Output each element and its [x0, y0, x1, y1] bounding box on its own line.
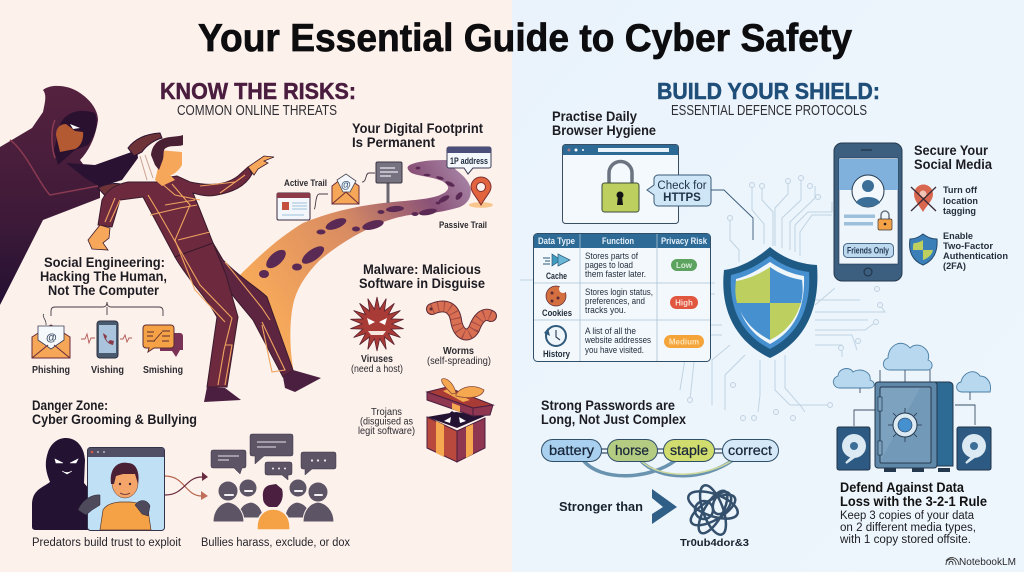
callout: check for HTTPS: HTTPS: [663, 192, 701, 204]
heading: browser hygiene: Browser Hygiene: [552, 122, 656, 138]
icon: phishing envelope: [32, 314, 70, 358]
label: stronger than: Stronger than: [559, 499, 643, 514]
heading: secure social media: Secure Your: [914, 143, 989, 158]
text: enable 2FA: Authentication: [943, 251, 1008, 262]
heading: know the risks: [160, 78, 356, 119]
row: cookies: High: [675, 298, 693, 308]
pill: battery: battery: [549, 443, 594, 458]
labels: viruses and worms: (need a host): [351, 364, 403, 375]
row: cache: them faster later.: [585, 269, 646, 279]
manipulated victim figure with circuit suit: [88, 135, 321, 402]
row: history: Medium: [669, 338, 699, 346]
head: [155, 168, 175, 186]
row: cache: Low: [676, 261, 693, 270]
passphrase chain: [542, 440, 778, 476]
footprints: [259, 166, 464, 278]
connectors: [314, 173, 375, 209]
row: history: History: [543, 349, 570, 359]
text: enable 2FA: [943, 231, 1008, 272]
callout: IP address: 1P address: [450, 156, 488, 166]
right background: [512, 0, 1024, 572]
row: history: website addresses: [584, 335, 651, 345]
row: cookies: [542, 285, 698, 318]
table header: Privacy Risk: [661, 236, 708, 247]
circuit traces: [520, 176, 885, 420]
text: 3-2-1 rule: Defend Against Data: [840, 479, 964, 495]
text: turn off location tagging: tagging: [943, 206, 976, 217]
heading: social engineering: Hacking The Human,: [40, 269, 167, 284]
pill: staple: [664, 440, 714, 462]
row: history: you have visited.: [585, 345, 644, 355]
label: trojans: Trojans: [371, 406, 402, 418]
shoes: [283, 370, 321, 392]
hooded manipulator figure: [0, 86, 162, 305]
heading: malware: Software in Disguise: [359, 276, 485, 291]
icon: smishing chat: [143, 325, 183, 357]
text: 3-2-1 rule: [839, 479, 987, 546]
heading: secure social media: Social Media: [914, 157, 992, 172]
heading: build your shield: ESSENTIAL DEFENCE PROTOCOLS: [671, 103, 867, 119]
pill: battery: [542, 440, 602, 462]
text: 3-2-1 rule: on 2 different media types,: [840, 522, 976, 534]
icon: envelope: @: [341, 180, 351, 191]
captions: predators and bullies: Bullies harass, exclude, or dox: [201, 537, 350, 549]
panel: know the risks: [0, 78, 493, 549]
icon: envelope: [332, 174, 359, 204]
heading: build your shield: BUILD YOUR SHIELD:: [657, 78, 880, 104]
text: enable 2FA: Two-Factor: [943, 241, 993, 252]
safe vault: [875, 382, 953, 472]
back leg: [205, 243, 293, 377]
row: cookies: Stores login status,: [585, 287, 653, 297]
captions: predators and bullies: Predators build trust to exploit: [32, 537, 182, 549]
labels: attack types: Phishing: [32, 364, 70, 376]
row: history: [543, 326, 704, 359]
pill: correct: [722, 440, 778, 462]
labels: viruses and worms: Worms: [443, 345, 474, 357]
left background: [0, 0, 512, 572]
labels: viruses and worms: Viruses: [361, 353, 393, 365]
table: browser data privacy risk: [534, 234, 710, 362]
text: turn off location tagging: Turn off: [943, 185, 978, 196]
labels: attack types: Vishing: [91, 364, 124, 376]
callout: IP address: [447, 147, 491, 174]
crossing arrows: [165, 472, 208, 500]
front leg: [175, 243, 238, 387]
table header: Function: [602, 236, 634, 247]
row: cache: [543, 251, 697, 281]
video window with child: [88, 448, 164, 530]
heading: strong passwords: Strong Passwords are: [541, 398, 675, 413]
table header: Data Type: [538, 236, 575, 247]
title: Your Essential Guide to Cyber Safety: [198, 17, 852, 60]
icon: signpost: [376, 162, 402, 203]
row: cookies: preferences, and: [585, 296, 645, 306]
heading: browser hygiene: Practise Daily: [552, 108, 637, 124]
circuit lines: [105, 175, 285, 385]
callout: check for HTTPS: [647, 175, 753, 240]
label: trojans: [358, 406, 415, 437]
icon: tangled knot: [685, 482, 741, 538]
labels: attack types: [32, 364, 183, 376]
row: history: A list of all the: [585, 326, 636, 336]
heading: browser hygiene: [552, 108, 656, 138]
text: 3-2-1 rule: Loss with the 3-2-1 Rule: [840, 493, 987, 509]
icon: worm: [430, 306, 491, 335]
panel: malware: [350, 262, 493, 462]
central shield: [723, 247, 817, 358]
heading: build your shield: [657, 78, 880, 119]
icon: web page: [277, 193, 310, 220]
label: passive trail: Passive Trail: [439, 220, 487, 231]
label: active trail: Active Trail: [284, 178, 327, 189]
label: trojans: legit software): [358, 426, 415, 437]
panel: social engineering: [32, 255, 183, 376]
speech bubbles: [211, 434, 336, 480]
panel: build your shield: [520, 78, 1008, 549]
callout: check for HTTPS: Check for: [657, 180, 707, 192]
text: enable 2FA: Enable: [943, 231, 973, 242]
captions: predators and bullies: [32, 537, 350, 549]
predator silhouette: [32, 438, 90, 530]
text: turn off location tagging: [943, 185, 978, 217]
heading: danger zone: [32, 398, 197, 427]
icon: small shield: [910, 234, 937, 265]
heading: social engineering: [40, 255, 167, 298]
digital footprint trail: [240, 121, 493, 372]
heading: know the risks: KNOW THE RISKS:: [160, 78, 356, 104]
icon: location off: [911, 184, 936, 212]
hard drives: [837, 427, 991, 470]
icon: trojan gift box: [427, 379, 493, 462]
hand on arm: [98, 184, 129, 200]
panel: danger zone: [32, 398, 350, 549]
heading: secure social media: [914, 143, 992, 172]
table header: [538, 236, 708, 247]
torso and arms: [98, 167, 252, 257]
label: trojans: (disguised as: [360, 416, 413, 428]
heading: malware: Malware: Malicious: [363, 262, 481, 277]
heading: social engineering: Social Engineering:: [44, 255, 165, 270]
heading: digital footprint: Your Digital Footprint: [352, 121, 483, 136]
text: 3-2-1 rule: with 1 copy stored offsite.: [839, 534, 971, 546]
hand on head: [128, 133, 162, 156]
bully crowd: [213, 479, 334, 530]
text: enable 2FA: (2FA): [943, 261, 966, 272]
icon: vishing phone: [81, 321, 132, 358]
row: cookies: Cookies: [542, 308, 572, 318]
row: cache: Cache: [546, 271, 567, 281]
icon: location pin: [469, 177, 493, 208]
browser window with padlock: [562, 144, 678, 224]
hands: [248, 156, 274, 175]
text: turn off location tagging: location: [943, 196, 978, 207]
row: cookies: tracks you.: [585, 305, 626, 315]
heading: digital footprint: [352, 121, 483, 150]
heading: know the risks: COMMON ONLINE THREATS: [177, 103, 337, 119]
labels: attack types: Smishing: [143, 364, 183, 376]
pill: correct: correct: [728, 443, 772, 458]
heading: strong passwords: Long, Not Just Complex: [541, 412, 686, 427]
row: cache: Stores parts of: [585, 251, 638, 261]
pill: horse: horse: [615, 443, 649, 458]
icon: phishing envelope: @: [46, 332, 57, 344]
row: cache: pages to load: [585, 260, 633, 270]
predator hands: [78, 495, 150, 516]
heading: social engineering: Not The Computer: [48, 283, 160, 298]
pill: staple: staple: [670, 443, 708, 458]
NotebookLM attribution: NotebookLM: [959, 556, 1016, 568]
label: weak password: Tr0ub4dor&3: [680, 537, 749, 549]
phone with privacy settings: [834, 143, 902, 281]
labels: viruses and worms: (self-spreading): [427, 356, 491, 367]
icon: virus: [350, 297, 404, 351]
phone with privacy settings: Friends Only: [847, 246, 889, 256]
heading: malware: [359, 262, 485, 291]
heading: danger zone: Danger Zone:: [32, 398, 108, 413]
heading: digital footprint: Is Permanent: [352, 135, 435, 150]
padlock: [602, 162, 639, 212]
clouds: [833, 343, 991, 426]
labels: viruses and worms: [351, 345, 491, 375]
icon: greater-than chevron: [652, 489, 677, 524]
text: 3-2-1 rule: Keep 3 copies of your data: [840, 510, 975, 522]
heading: danger zone: Cyber Grooming & Bullying: [32, 412, 197, 427]
heading: strong passwords: [541, 398, 686, 427]
pill: horse: [608, 440, 658, 462]
